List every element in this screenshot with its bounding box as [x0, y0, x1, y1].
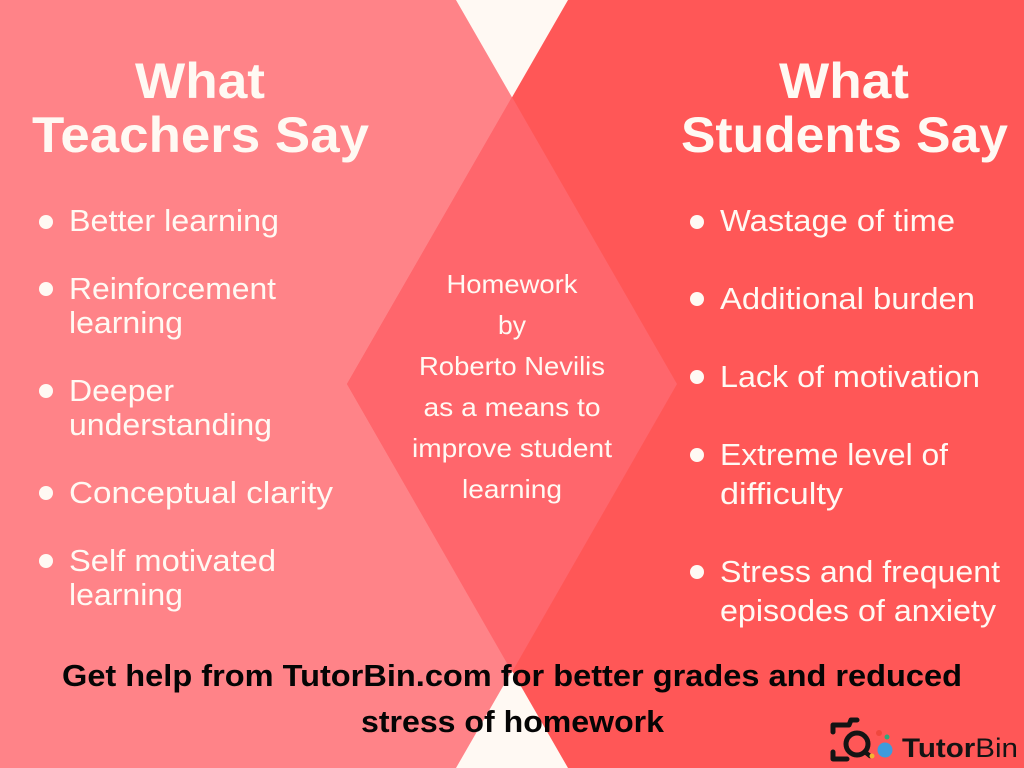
- list: students points: Stress and frequent: [720, 554, 1000, 589]
- list: teachers points: Better learning: [69, 203, 279, 238]
- list: students points: Extreme level of: [720, 437, 948, 472]
- logo: TutorBin: [833, 720, 1018, 763]
- list: students points: episodes of anxiety: [720, 593, 997, 628]
- heading: what teachers say: Teachers Say: [32, 107, 369, 163]
- list: students points: Lack of motivation: [720, 359, 980, 394]
- list: teachers points: [39, 203, 334, 612]
- panel: centre diamond: [347, 97, 677, 672]
- list: teachers points: understanding: [69, 407, 272, 442]
- list: teachers points: learning: [69, 577, 183, 612]
- list: teachers points: Deeper: [69, 373, 174, 408]
- heading: what students say: Students Say: [681, 107, 1008, 163]
- heading: what teachers say: [32, 53, 369, 163]
- wordmark: TutorBin: [902, 733, 1018, 763]
- list: students points: Wastage of time: [720, 203, 955, 238]
- list: teachers points: Conceptual clarity: [69, 475, 334, 510]
- list: students points: difficulty: [720, 476, 844, 511]
- call to action: [62, 658, 962, 739]
- text: centre topic: learning: [462, 474, 562, 504]
- list: students points: Additional burden: [720, 281, 975, 316]
- call to action: Get help from TutorBin.com for better grades and reduced: [62, 658, 962, 693]
- heading: what students say: [681, 53, 1008, 163]
- text: centre topic: by: [498, 310, 526, 340]
- list: teachers points: Self motivated: [69, 543, 276, 578]
- text: centre topic: Roberto Nevilis: [419, 351, 605, 381]
- heading: what teachers say: What: [135, 53, 265, 109]
- list: students points: [690, 203, 1000, 628]
- text: centre topic: Homework: [446, 269, 579, 299]
- text: centre topic: [412, 269, 613, 504]
- text: centre topic: improve student: [412, 433, 613, 463]
- list: teachers points: Reinforcement: [69, 271, 276, 306]
- heading: what students say: What: [779, 53, 909, 109]
- call to action: stress of homework: [361, 704, 665, 739]
- panel: teachers background: [0, 0, 677, 768]
- icon: camera frame: [833, 720, 892, 759]
- panel: students background: [347, 0, 1024, 768]
- text: centre topic: as a means to: [424, 392, 600, 422]
- list: teachers points: learning: [69, 305, 183, 340]
